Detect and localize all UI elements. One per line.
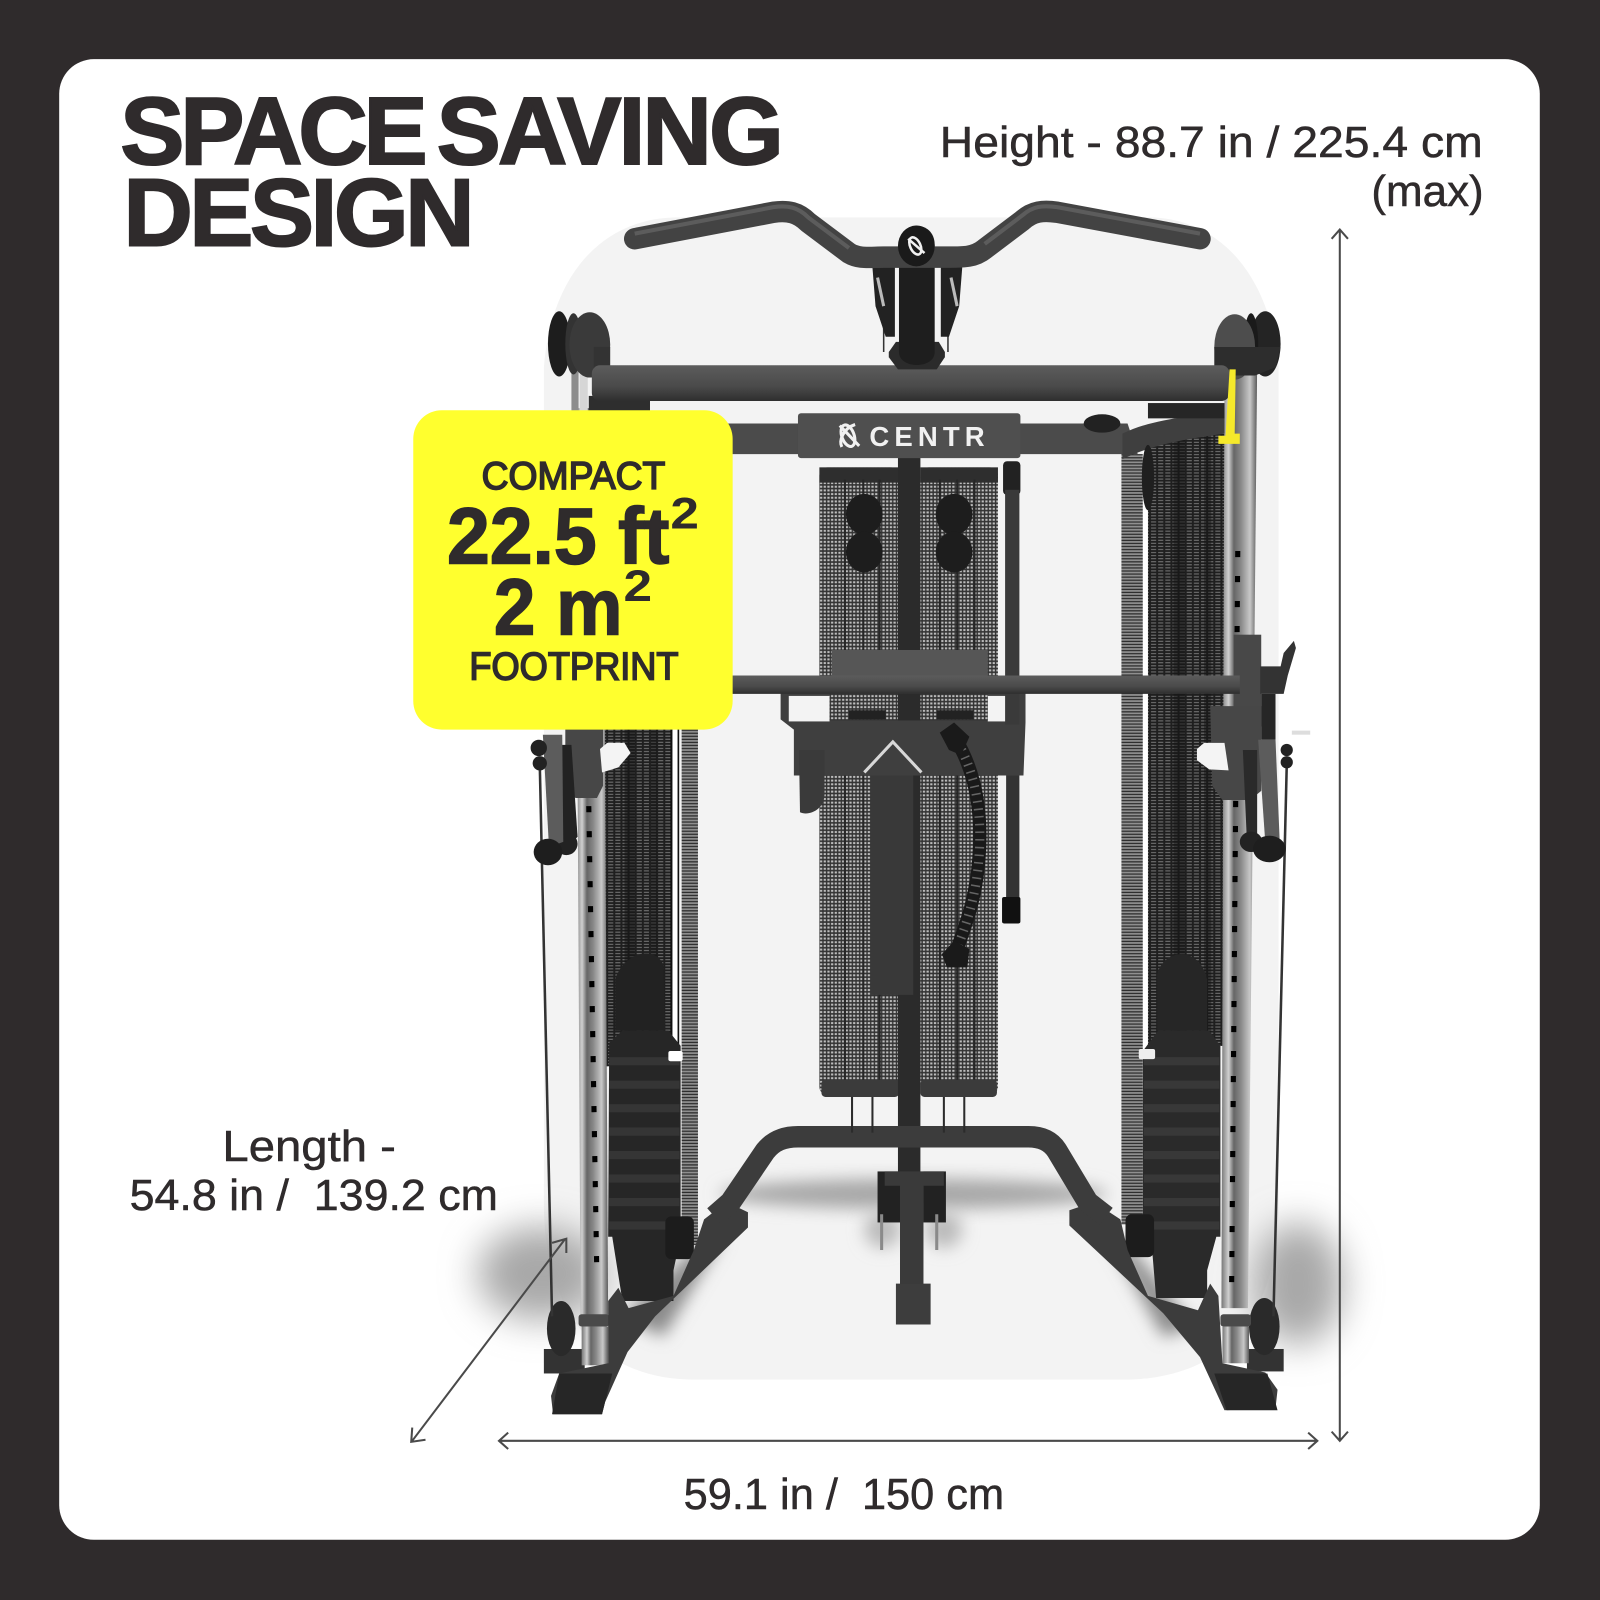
left upright column	[571, 369, 650, 1321]
rear logo beam	[714, 403, 1224, 510]
footprint backdrop	[544, 217, 1279, 1380]
left weight stack	[608, 953, 694, 1301]
yellow footprint callout: COMPACT	[482, 455, 665, 498]
right weight stack	[1126, 954, 1220, 1298]
weight plate panel	[832, 650, 988, 701]
low pull-up bar	[714, 676, 1240, 694]
width label: 59.1 in / 150 cm	[684, 1470, 1004, 1519]
width arrow	[499, 1433, 1317, 1449]
yellow footprint callout: 22.5 ft	[447, 491, 669, 580]
accessory rack	[781, 692, 1026, 776]
height label: (max)	[1371, 167, 1484, 216]
height label: Height - 88.7 in / 225.4 cm	[940, 118, 1483, 167]
tricep rope	[940, 722, 980, 967]
top crossbar	[592, 365, 1230, 401]
height label	[940, 118, 1484, 216]
brand wordmark: CENTR	[869, 421, 985, 452]
centre lower base	[714, 1097, 1106, 1324]
right carriage and handle	[1197, 635, 1310, 862]
left tower mesh	[603, 413, 698, 1245]
stored bar	[1002, 461, 1020, 923]
bar logo badge	[898, 226, 935, 266]
yellow safety latch	[1218, 369, 1240, 444]
left carriage and handle	[531, 727, 631, 865]
length label: 54.8 in / 139.2 cm	[130, 1171, 498, 1220]
length label	[130, 1122, 498, 1220]
yellow footprint callout: 2 m	[494, 563, 622, 652]
right upright column	[1221, 367, 1257, 1308]
length label: Length -	[222, 1122, 396, 1171]
yellow footprint callout: 2	[670, 488, 699, 539]
right cable	[1273, 765, 1287, 1316]
hanging strap	[870, 776, 913, 995]
yellow footprint callout	[413, 410, 733, 730]
centre pulleys	[846, 494, 972, 572]
lat pulldown bar	[635, 206, 1200, 257]
top pulleys left	[548, 311, 610, 378]
right lower pulley and foot	[1069, 1202, 1284, 1410]
title: SAVING	[437, 78, 784, 185]
title: DESIGN	[123, 159, 474, 266]
title: SPACE	[120, 78, 428, 185]
height arrow	[1332, 230, 1348, 1441]
length arrow	[411, 1239, 566, 1442]
yellow footprint callout: 2	[623, 560, 652, 611]
left cable	[540, 765, 552, 1316]
right tower mesh	[1121, 434, 1224, 1224]
left lower pulley and foot	[544, 1202, 748, 1414]
brand mark	[838, 423, 859, 448]
triangle handle	[864, 742, 921, 772]
centre post	[898, 454, 920, 1209]
lat pulldown post	[872, 226, 962, 369]
top pulleys right	[1214, 311, 1281, 380]
yellow footprint callout: FOOTPRINT	[469, 646, 679, 689]
strap handle	[799, 750, 824, 813]
centre mesh columns	[819, 467, 998, 1097]
floor shadows	[478, 1179, 1343, 1345]
gym machine	[531, 206, 1310, 1414]
title	[120, 78, 784, 266]
